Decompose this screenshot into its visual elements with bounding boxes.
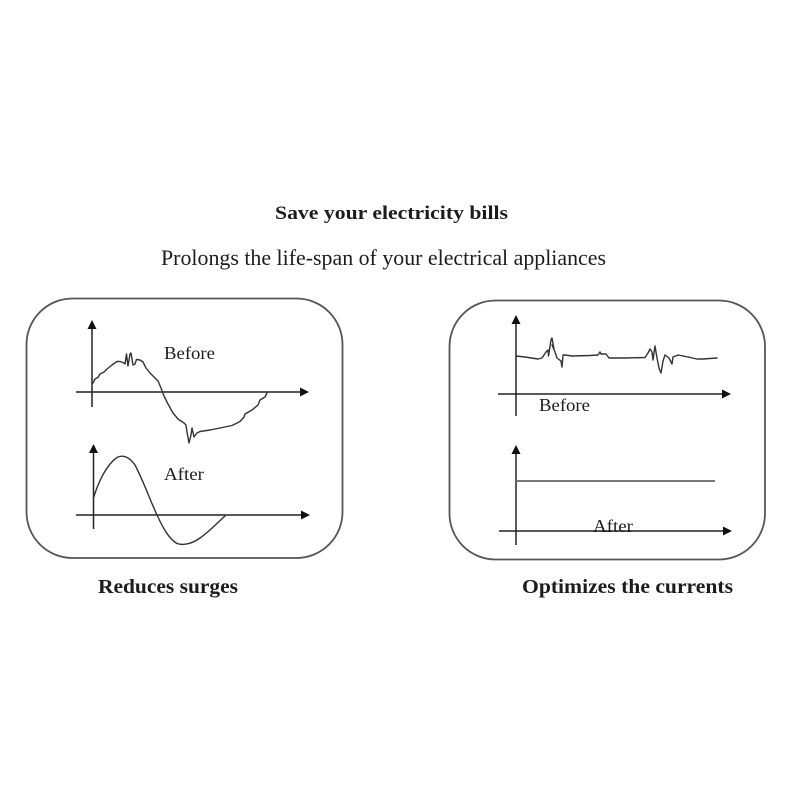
- panel: reduces surges: [26, 298, 342, 558]
- label: before: Before: [539, 395, 590, 415]
- label: after: After: [164, 464, 204, 484]
- chart: surge before: [76, 320, 309, 443]
- subtitle: Prolongs the life-span of your electrical appliances: [161, 245, 606, 270]
- chart: current after: [499, 445, 732, 545]
- label: before: Before: [164, 343, 215, 363]
- label: after: After: [593, 516, 633, 536]
- caption: reduces surges: Reduces surges: [98, 576, 238, 598]
- title: Save your electricity bills: [275, 203, 508, 224]
- chart: surge after: [76, 444, 310, 544]
- caption: optimizes the currents: Optimizes the currents: [522, 576, 733, 598]
- chart: current before: [498, 315, 731, 416]
- panel: optimizes the currents: [450, 300, 765, 560]
